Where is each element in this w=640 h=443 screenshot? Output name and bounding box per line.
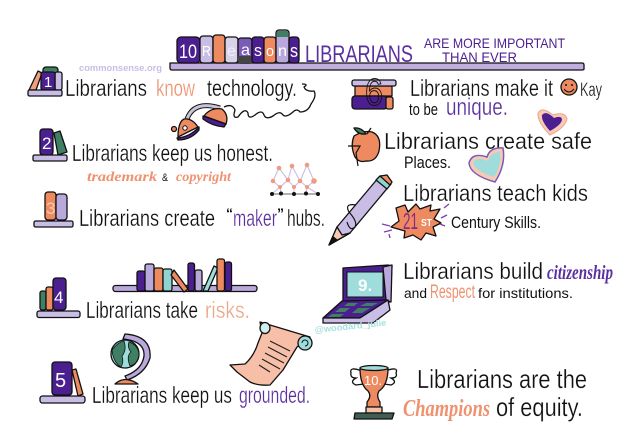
icon: smiley xyxy=(561,79,577,95)
reason 6: to be xyxy=(409,100,438,119)
icon: network diagram xyxy=(270,163,320,196)
reason 5: grounded. xyxy=(239,382,310,408)
reason 10: of equity. xyxy=(496,392,583,422)
reason 1: technology. xyxy=(207,75,297,101)
badge: 21st starburst xyxy=(382,204,449,240)
text: Librarians keep us xyxy=(92,382,232,408)
annotation: trademark and copyright: copyright xyxy=(176,170,232,185)
book spines spelling 10 Reasons: s xyxy=(290,41,298,61)
icon: books 4 xyxy=(37,278,80,318)
book spines spelling 10 Reasons: R xyxy=(202,43,211,60)
credit: @woodard_julie: @woodard_julie xyxy=(314,318,387,335)
text: Librarians take xyxy=(86,297,198,323)
icon: books 3 xyxy=(34,192,73,227)
text: Librarians make it xyxy=(410,75,553,101)
reason 8: Century Skills. xyxy=(451,213,541,232)
book spines spelling 10 Reasons: n xyxy=(278,43,287,60)
book spines spelling 10 Reasons xyxy=(177,30,299,63)
icon: headphones xyxy=(172,84,315,140)
reason 1 xyxy=(28,67,315,140)
icon: pencil xyxy=(329,175,392,245)
icon: bookshelf xyxy=(113,259,257,292)
icon: books 4: 4 xyxy=(54,288,63,307)
shelf xyxy=(170,63,584,70)
reason 7 xyxy=(348,110,592,182)
subheading: ARE MORE IMPORTANT xyxy=(424,35,565,51)
reason 4 xyxy=(37,259,257,323)
icon: trophy xyxy=(351,366,397,419)
reason 3 xyxy=(34,192,325,231)
icon: teal heart xyxy=(469,148,504,182)
icon: books 5: 5 xyxy=(55,370,66,392)
reason 5 xyxy=(40,322,312,408)
reason 10 xyxy=(351,364,587,422)
reason 9 xyxy=(314,258,613,335)
text: Librarians xyxy=(65,75,147,101)
icon: purple heart xyxy=(538,110,567,135)
icon: books 5 xyxy=(40,362,85,403)
book spines spelling 10 Reasons: e xyxy=(227,43,236,60)
header: title shelf: THAN EVER xyxy=(442,49,517,65)
reason 3: “ xyxy=(226,205,233,221)
icon: books 1: 1 xyxy=(44,74,52,91)
reason 6 xyxy=(352,72,602,121)
book spines spelling 10 Reasons: 10 xyxy=(179,42,197,63)
reason 10: Champions xyxy=(403,396,490,422)
icon: books 6: 6 xyxy=(365,72,383,114)
reason 6: unique. xyxy=(446,94,508,121)
icon: books 3: 3 xyxy=(46,199,55,218)
icon: books 2 xyxy=(33,129,67,161)
icon: trophy: 10. xyxy=(364,373,382,388)
text: Librarians are the xyxy=(417,364,587,394)
text: Librarians create safe xyxy=(384,128,592,154)
reason 7: Places. xyxy=(404,153,451,172)
icon: books 1 xyxy=(28,67,62,96)
icon: books 6 xyxy=(352,72,396,114)
reason 6: Kay xyxy=(580,80,602,101)
reason 2 xyxy=(33,129,320,196)
annotation: trademark and copyright: trademark xyxy=(87,170,157,185)
annotation: trademark and copyright xyxy=(87,170,232,185)
heading: LIBRARIANS: LIBRARIANS xyxy=(305,41,413,68)
reason 9: for institutions. xyxy=(478,285,573,301)
book spines spelling 10 Reasons: a xyxy=(241,42,250,59)
badge: 21st starburst: ST xyxy=(421,218,432,229)
text: Librarians teach kids xyxy=(403,180,588,206)
credit: commonsense.org: commonsense.org xyxy=(79,63,162,73)
book spines spelling 10 Reasons: o xyxy=(266,43,274,60)
text: Librarians create xyxy=(79,205,215,231)
text: Librarians build xyxy=(403,258,543,284)
reason 9: Respect xyxy=(430,282,475,303)
text: Librarians keep us honest. xyxy=(72,140,273,166)
reason 3: hubs. xyxy=(287,205,325,231)
icon: books 2: 2 xyxy=(42,134,51,153)
reason 1: know xyxy=(156,75,195,101)
badge: 21st starburst: 21 xyxy=(403,208,418,234)
icon: laptop xyxy=(323,265,392,323)
reason 4: risks. xyxy=(205,297,250,323)
annotation: trademark and copyright: & xyxy=(162,172,169,184)
icon: globe xyxy=(111,334,150,384)
reason 8 xyxy=(329,175,588,245)
reason 3: maker xyxy=(233,205,277,231)
icon: scroll xyxy=(230,322,312,385)
reason 9: and xyxy=(404,285,427,301)
reason 3: ” xyxy=(277,205,284,221)
header: title shelf xyxy=(170,30,584,70)
icon: apple xyxy=(348,128,380,166)
icon: laptop: 9. xyxy=(358,276,372,295)
reason 9: citizenship xyxy=(547,262,613,284)
book spines spelling 10 Reasons: s xyxy=(254,41,262,60)
